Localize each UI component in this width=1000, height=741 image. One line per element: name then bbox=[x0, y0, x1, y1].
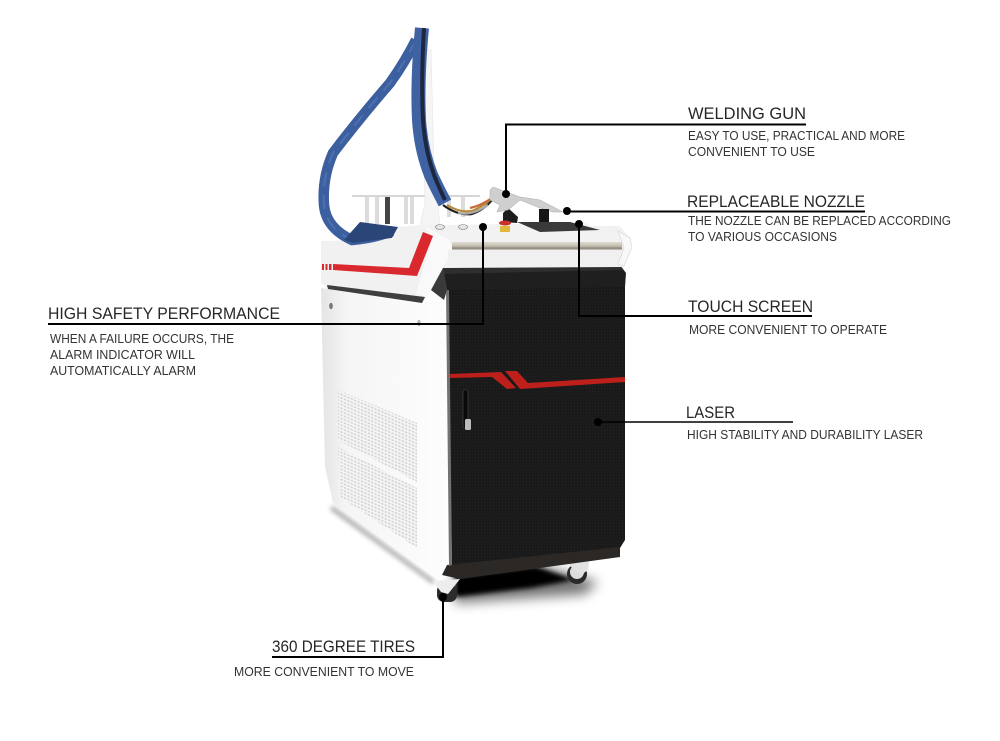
floor shadow core bbox=[455, 566, 575, 597]
welding gun description: CONVENIENT TO USE bbox=[688, 145, 815, 159]
front caster wheel bbox=[433, 579, 460, 602]
cable reel bbox=[352, 195, 480, 224]
black cabinet door bbox=[443, 266, 625, 566]
callout: touch screen bbox=[575, 220, 887, 337]
touch screen bbox=[517, 222, 600, 232]
red door stripe right bbox=[505, 371, 625, 389]
nozzle description: THE NOZZLE CAN BE REPLACED ACCORDING bbox=[688, 214, 951, 228]
blue cable left loop bbox=[324, 40, 416, 240]
welding gun leader line bbox=[502, 124, 806, 198]
cabinet dark top band bbox=[443, 265, 626, 290]
safety description: WHEN A FAILURE OCCURS, THE bbox=[50, 332, 234, 346]
safety heading: HIGH SAFETY PERFORMANCE bbox=[48, 304, 280, 323]
cable sleeve on housing bbox=[344, 222, 398, 243]
ventilation grille upper bbox=[338, 390, 417, 482]
white support pole bbox=[420, 50, 440, 226]
callout: high safety performance bbox=[48, 223, 487, 378]
rear caster wheel bbox=[565, 554, 590, 584]
door handle bbox=[463, 390, 471, 430]
angled corner panel bbox=[416, 225, 452, 297]
tires heading: 360 DEGREE TIRES bbox=[272, 637, 415, 656]
side screws bbox=[329, 303, 421, 326]
callout: welding gun bbox=[502, 104, 905, 198]
welding gun heading: WELDING GUN bbox=[688, 104, 806, 123]
safety description: ALARM INDICATOR WILL bbox=[50, 348, 195, 362]
top deck surface bbox=[437, 223, 630, 243]
white side panel bbox=[321, 288, 448, 580]
lower fascia bbox=[448, 250, 620, 265]
welding gun description: EASY TO USE, PRACTICAL AND MORE bbox=[688, 129, 905, 143]
welding gun bbox=[490, 187, 563, 212]
laser leader line bbox=[594, 418, 793, 426]
tires leader line bbox=[272, 593, 447, 657]
cable dark seam bbox=[422, 28, 445, 200]
door edge strip bbox=[446, 290, 452, 566]
laser heading: LASER bbox=[686, 403, 735, 422]
top deck buttons bbox=[436, 224, 468, 230]
nozzle description bbox=[688, 214, 951, 244]
gun stand bbox=[503, 208, 518, 223]
welding gun description bbox=[688, 129, 905, 159]
right rail bracket bbox=[618, 231, 632, 266]
left cable sleeve texture bbox=[324, 40, 416, 240]
dark housing strip bbox=[327, 285, 425, 303]
gun knob bbox=[539, 209, 549, 222]
callout: replaceable nozzle bbox=[563, 192, 951, 244]
steel rail bbox=[452, 242, 622, 250]
callout: laser bbox=[594, 403, 923, 442]
red door stripe left bbox=[450, 372, 516, 389]
cabinet plinth bbox=[442, 547, 620, 579]
nozzle heading: REPLACEABLE NOZZLE bbox=[687, 192, 865, 211]
laser description: HIGH STABILITY AND DURABILITY LASER bbox=[687, 428, 923, 442]
touch screen heading: TOUCH SCREEN bbox=[688, 297, 813, 316]
touch screen leader line bbox=[575, 220, 812, 316]
dark corner wedge bbox=[431, 268, 447, 300]
tires description: MORE CONVENIENT TO MOVE bbox=[234, 665, 414, 679]
nozzle leader line bbox=[563, 207, 865, 215]
red tick marks bbox=[322, 264, 332, 270]
ventilation grille lower bbox=[338, 447, 417, 548]
callout: 360 degree tires bbox=[234, 593, 447, 679]
safety description: AUTOMATICALLY ALARM bbox=[50, 364, 196, 378]
touch screen description: MORE CONVENIENT TO OPERATE bbox=[689, 323, 887, 337]
gun wires bbox=[443, 198, 492, 214]
nozzle description: TO VARIOUS OCCASIONS bbox=[688, 230, 837, 244]
safety description bbox=[50, 332, 234, 378]
floor shadow soft bbox=[452, 566, 598, 603]
red housing stripe bbox=[333, 232, 433, 276]
blue cable right run bbox=[418, 28, 445, 203]
emergency stop button bbox=[499, 220, 511, 232]
safety leader line bbox=[48, 223, 487, 324]
side floor shadow bbox=[330, 505, 436, 584]
upper white housing bbox=[321, 225, 632, 303]
laser welding machine bbox=[321, 28, 632, 603]
cabinet top highlight bbox=[443, 265, 623, 274]
